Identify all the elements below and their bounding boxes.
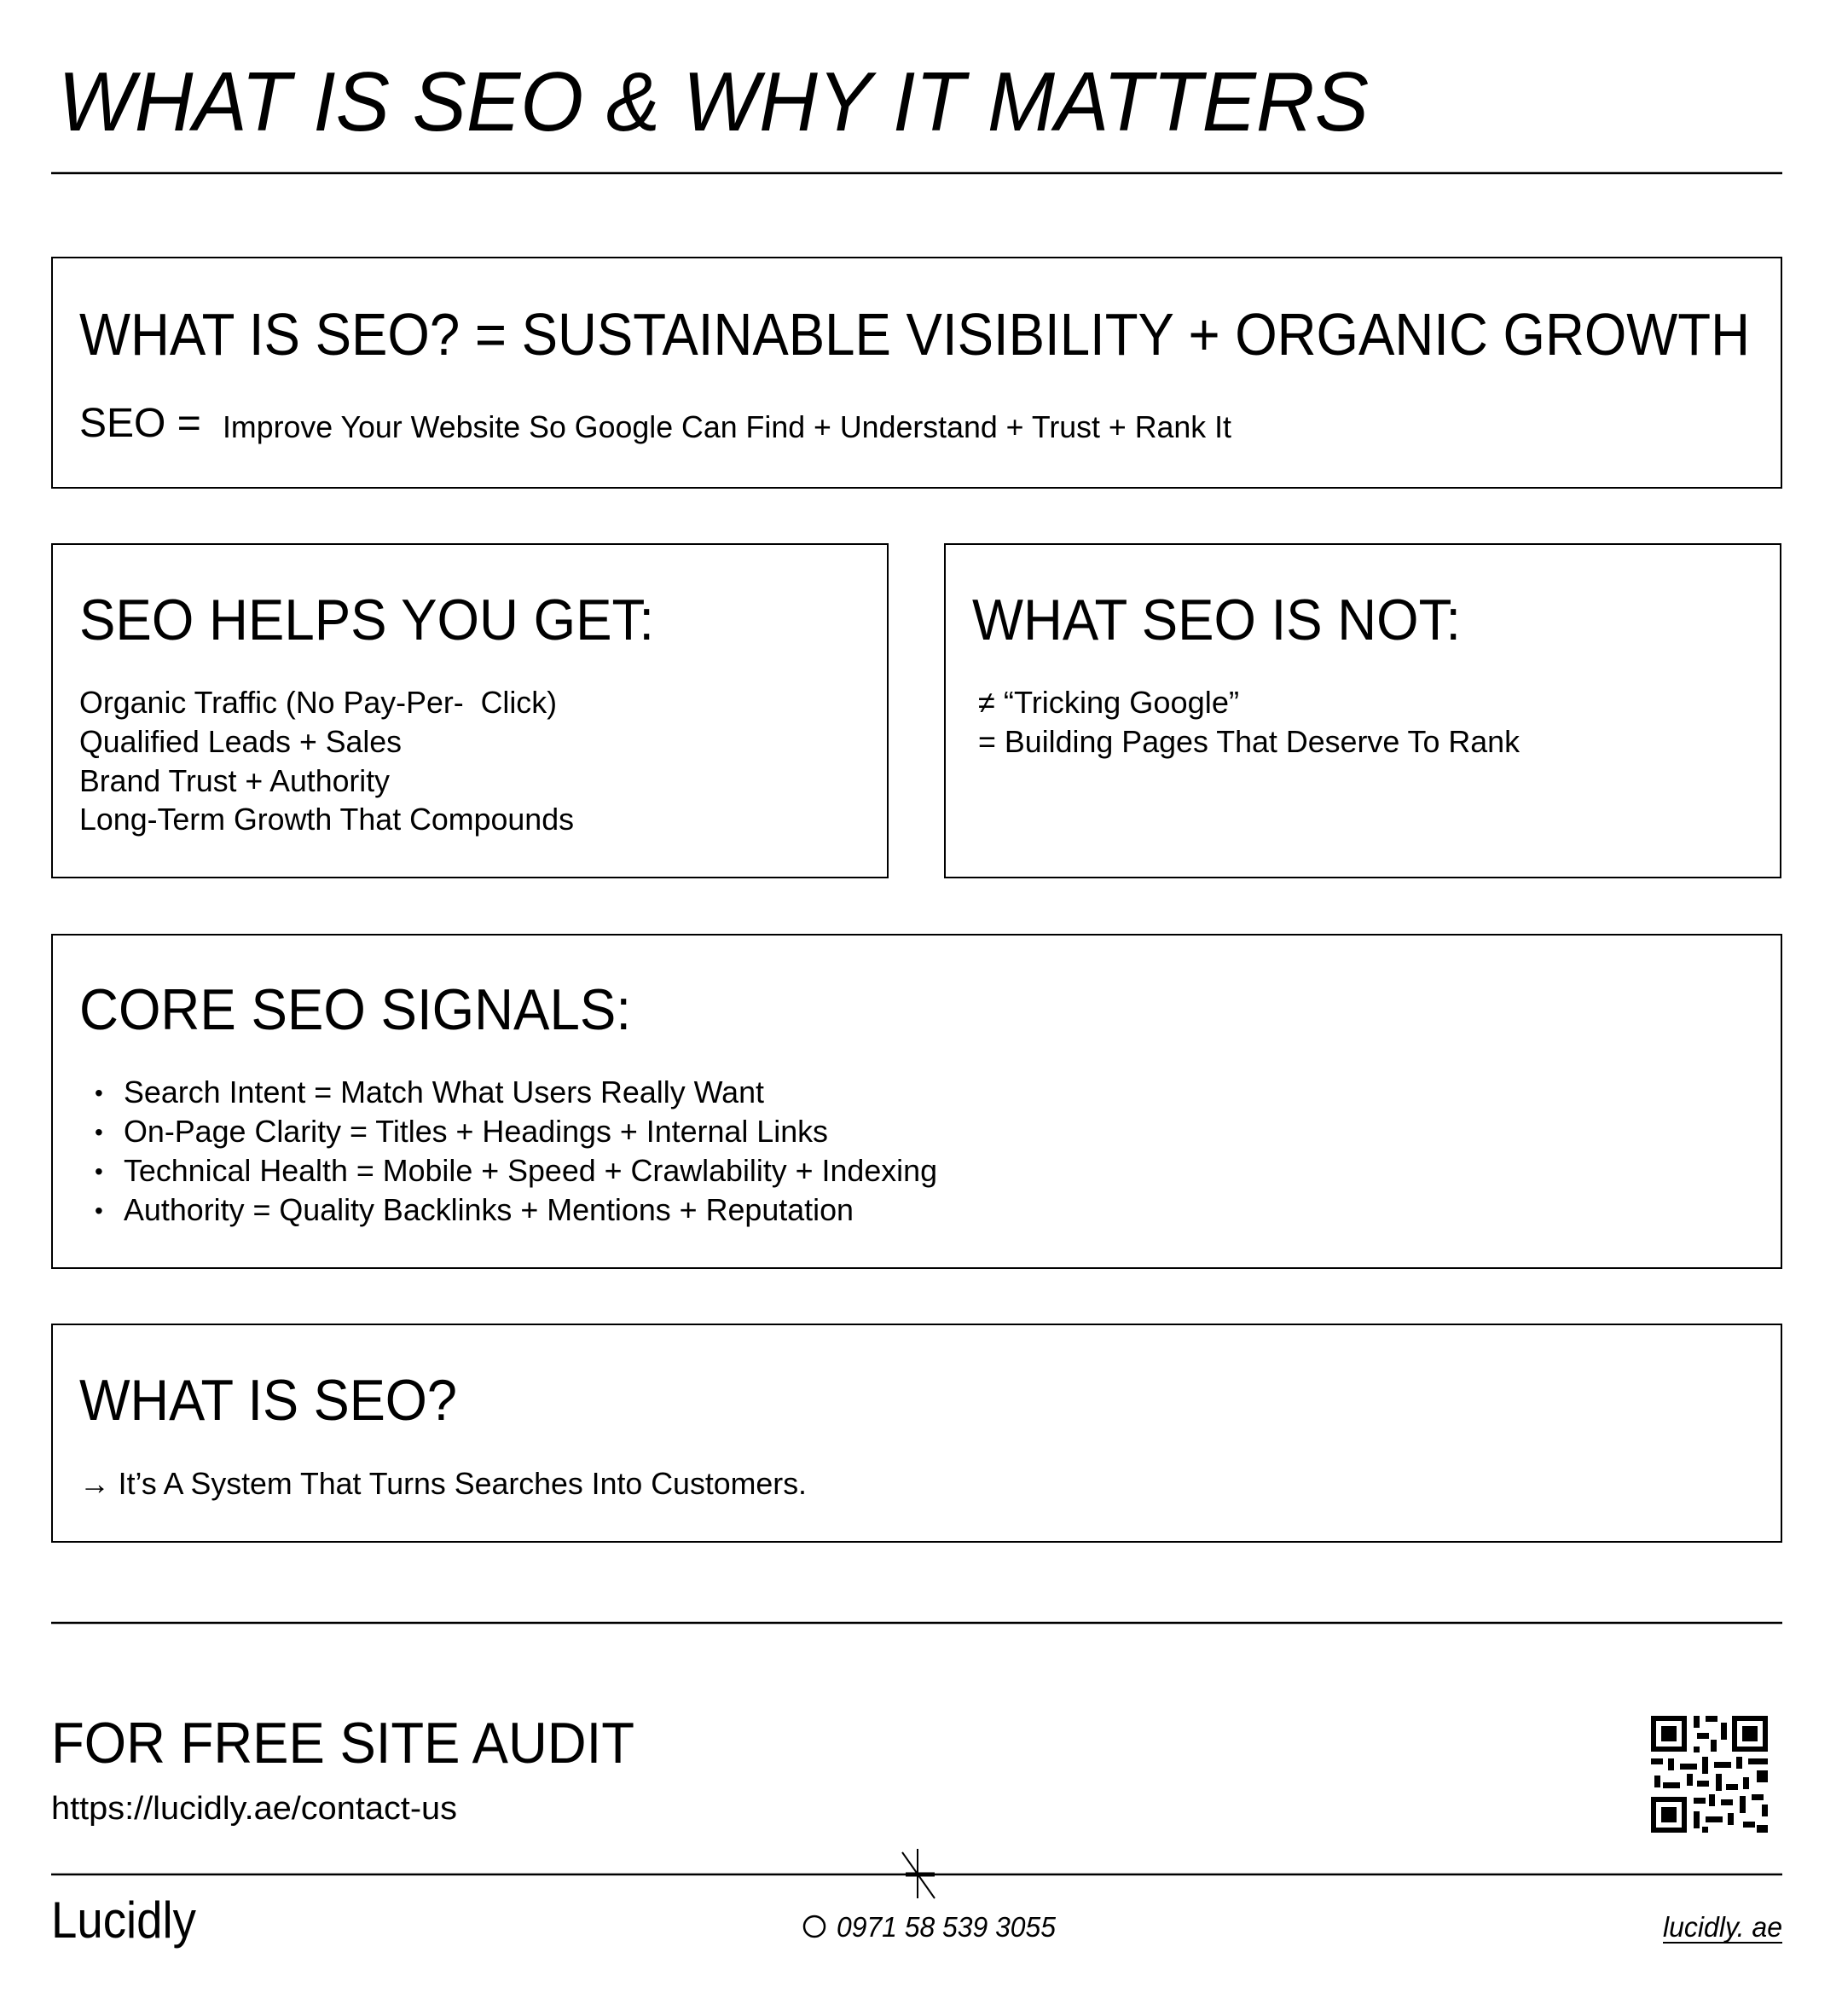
icon: star mark (902, 1849, 935, 1898)
text: summary: → It’s A System That Turns Searches Into Customers. (79, 1466, 807, 1501)
icon: qr code (1651, 1716, 1768, 1833)
list: not (978, 685, 1521, 759)
text: SEO equation: SEO = (79, 401, 201, 446)
list: signals: Search Intent = Match What Users Really Want (124, 1075, 764, 1109)
heading: signals: CORE SEO SIGNALS: (79, 977, 631, 1042)
list: signals: • (95, 1158, 103, 1185)
list: benefits: Long-Term Growth That Compounds (79, 802, 574, 837)
logo: Lucidly (51, 1891, 196, 1949)
panel: core seo signals (52, 935, 1781, 1268)
list: benefits: Brand Trust + Authority (79, 763, 390, 798)
list: benefits: Organic Traffic (No Pay-Per- Click) (79, 685, 557, 720)
panel: what seo is not (945, 544, 1781, 878)
list: signals: • (95, 1197, 103, 1224)
panel: definition (52, 258, 1781, 488)
list: signals: On-Page Clarity = Titles + Headings + Internal Links (124, 1114, 828, 1149)
heading: summary: WHAT IS SEO? (79, 1368, 457, 1433)
list: signals (95, 1075, 937, 1227)
list: not: ≠ “Tricking Google” (978, 685, 1239, 720)
heading: not: WHAT SEO IS NOT: (972, 588, 1461, 652)
list: not: = Building Pages That Deserve To Rank (978, 724, 1521, 759)
list: benefits (79, 685, 574, 837)
list: signals: Technical Health = Mobile + Speed + Crawlability + Indexing (124, 1153, 937, 1188)
contact: website: lucidly. ae (1663, 1911, 1782, 1943)
list: benefits: Qualified Leads + Sales (79, 724, 402, 759)
heading: helps: SEO HELPS YOU GET: (79, 588, 654, 652)
list: signals: • (95, 1119, 103, 1145)
cta url: https://lucidly.ae/contact-us (51, 1791, 457, 1827)
title: WHAT IS SEO & WHY IT MATTERS (58, 55, 1369, 148)
panel: summary (52, 1324, 1781, 1542)
text: SEO equation (79, 401, 1231, 446)
list: signals: Authority = Quality Backlinks + Mentions + Reputation (124, 1192, 854, 1227)
cta heading: FOR FREE SITE AUDIT (51, 1711, 634, 1776)
panel: seo helps you get (52, 544, 888, 878)
contact: phone: 0971 58 539 3055 (837, 1911, 1057, 1943)
list: signals: • (95, 1080, 103, 1106)
text: SEO equation: Improve Your Website So Google Can Find + Understand + Trust + Rank It (223, 409, 1231, 444)
